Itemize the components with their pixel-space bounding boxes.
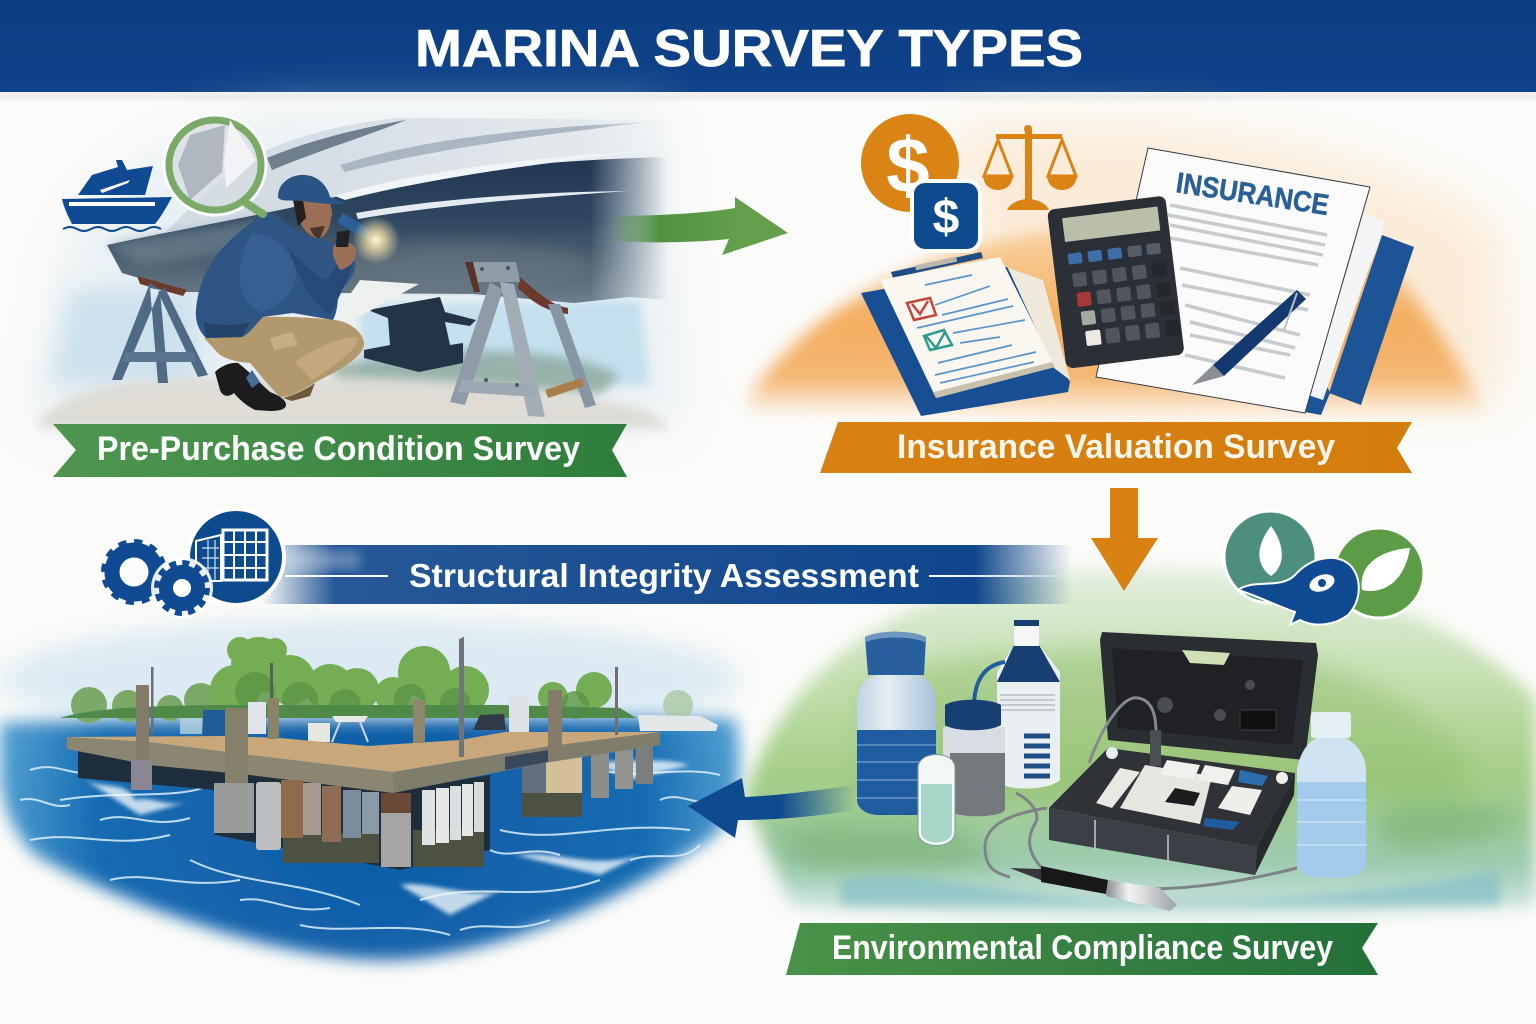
cap xyxy=(278,175,347,204)
hands xyxy=(333,242,356,270)
icon: dollar coin: $ xyxy=(886,121,930,209)
arrow: green to insurance xyxy=(605,197,788,255)
icon: eco badge xyxy=(1224,511,1424,625)
orange background hill xyxy=(745,125,1505,418)
teal check box xyxy=(924,330,952,350)
icon: dollar tile xyxy=(912,181,980,251)
engine under hull xyxy=(364,297,476,372)
dock deck xyxy=(67,732,660,793)
jacket xyxy=(196,212,355,338)
dock underside shadow xyxy=(78,750,490,870)
green hills background xyxy=(745,568,1536,920)
teal leaf circle xyxy=(1224,511,1316,603)
marina water xyxy=(0,718,739,960)
ribbon: pre-purchase condition survey xyxy=(53,424,627,477)
icon: dollar coin xyxy=(861,114,959,212)
jar with tube xyxy=(943,662,1005,816)
icon: boat xyxy=(62,160,172,231)
jack stand: left xyxy=(112,276,208,383)
right pier legs xyxy=(522,744,653,817)
panel: pre-purchase condition survey xyxy=(30,115,680,477)
arrow: blue to structural xyxy=(688,778,855,838)
icon: grid panel circle xyxy=(188,509,284,605)
insurance document: INSURANCE xyxy=(1174,167,1331,222)
flashlight xyxy=(337,213,372,240)
base top xyxy=(1049,748,1295,847)
panel: environmental compliance survey xyxy=(745,511,1536,975)
icon: scales of justice xyxy=(983,125,1077,210)
jack stand: right xyxy=(450,262,596,417)
pen xyxy=(1192,290,1306,385)
boot xyxy=(215,363,286,411)
panel: insurance valuation survey xyxy=(745,114,1505,473)
piling cylinders and panels xyxy=(131,708,484,867)
dock lamps and posts xyxy=(136,633,618,760)
ribbon: environmental compliance survey: Environmental Compliance Survey xyxy=(832,929,1333,967)
instrument panel xyxy=(1120,765,1212,824)
marina scene sky xyxy=(0,618,740,742)
icon: magnifier xyxy=(165,116,265,214)
base front xyxy=(1049,808,1257,875)
title banner xyxy=(0,0,1536,100)
panel: structural integrity scene xyxy=(0,618,740,960)
red check box xyxy=(907,298,936,320)
sample vial xyxy=(918,754,955,846)
calculator xyxy=(1047,195,1185,369)
reagent bottle: large xyxy=(857,632,936,815)
water bottle: clear xyxy=(1297,712,1366,878)
insurance document xyxy=(1096,148,1414,415)
sensor and arched cable xyxy=(1089,698,1156,763)
icon: dollar tile: $ xyxy=(933,191,960,244)
shoreline trees xyxy=(60,637,718,731)
lid xyxy=(1100,632,1318,760)
title banner: MARINA SURVEY TYPES xyxy=(415,20,1083,78)
ribbon: pre-purchase condition survey: Pre-Purchase Condition Survey xyxy=(97,430,580,468)
trousers xyxy=(204,317,364,397)
banner: structural integrity assessment: Structural Integrity Assessment xyxy=(409,557,919,594)
face xyxy=(297,201,332,238)
ribbon: insurance valuation survey: Insurance Valuation Survey xyxy=(897,428,1335,466)
surveyor with flashlight xyxy=(196,175,419,411)
fish xyxy=(1238,558,1359,625)
boat hull scene backdrop xyxy=(30,115,680,428)
arrow: orange down xyxy=(1091,488,1158,591)
probe with cable xyxy=(985,793,1297,911)
clipboard with checklist xyxy=(861,252,1070,416)
boat hull xyxy=(107,118,670,303)
water testing kit case xyxy=(1049,632,1318,875)
paper xyxy=(335,280,419,319)
ribbon: insurance valuation survey xyxy=(820,422,1412,473)
objects on deck xyxy=(180,696,529,742)
green leaf circle xyxy=(1334,528,1424,618)
banner: structural integrity assessment xyxy=(262,545,1072,604)
icon: gears xyxy=(104,542,213,619)
ribbon: environmental compliance survey xyxy=(786,923,1378,975)
reagent bottle: tall xyxy=(997,620,1060,789)
